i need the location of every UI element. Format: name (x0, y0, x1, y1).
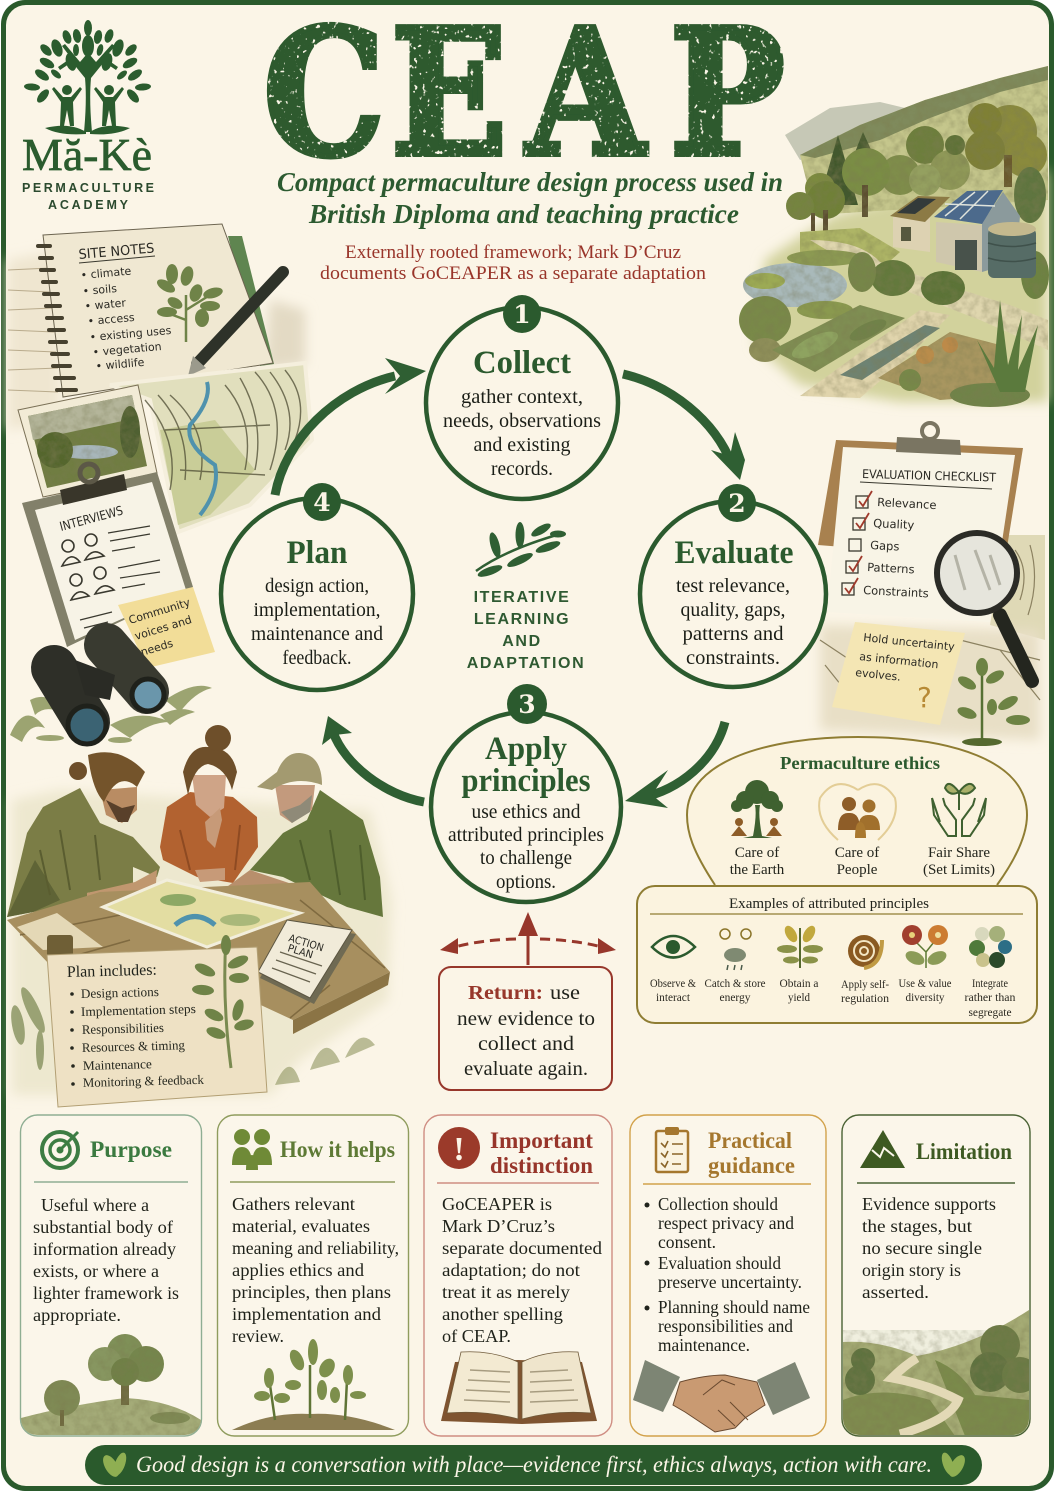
illustration: evaluation checklist clipboard: Hold uncertainty (863, 631, 956, 654)
label: self-regulation: regulation (841, 993, 889, 1005)
site notes text: • existing uses (89, 324, 172, 344)
step 2: Evaluate (640, 484, 826, 687)
label: catch and store: Catch & store (704, 978, 766, 990)
plan list: Design actions (81, 984, 159, 1001)
logo name: Mă-Kè (22, 129, 152, 180)
arrow: apply to plan (322, 716, 424, 802)
bulleted guidance: consent. (658, 1232, 716, 1252)
agave plant (977, 300, 1038, 392)
arrow: collect to evaluate (623, 374, 745, 480)
grass under table (275, 1037, 375, 1085)
icon: exclamation: ! (453, 1131, 465, 1168)
icon: mountain (860, 1130, 905, 1168)
central label: iterative learning and adaptation: ITERATIVE (474, 589, 570, 606)
icon: target (42, 1132, 78, 1168)
return callout: new evidence to (457, 1008, 595, 1030)
icon: leaf left (100, 1451, 129, 1479)
logo subtitle: PERMACULTURE (22, 181, 154, 195)
attribution note: Externally rooted framework; Mark D’Cruz (345, 242, 681, 263)
description: maintenance and (251, 624, 383, 645)
checklist items: Quality (873, 516, 915, 532)
water tank (988, 222, 1036, 278)
uncertainty note (832, 622, 965, 725)
return callout: evaluate again. (464, 1058, 588, 1080)
pond (743, 263, 847, 307)
label: fair share: (Set Limits) (923, 862, 995, 878)
garden beds (772, 305, 905, 372)
description: patterns and (682, 624, 784, 645)
principles panel (637, 886, 1037, 1023)
body text: meaning and reliability, (232, 1238, 399, 1258)
icon: spiral snail (848, 935, 882, 968)
person: centre woman (160, 725, 258, 883)
checklist items: Patterns (867, 560, 915, 576)
heading: Permaculture ethics (780, 753, 940, 773)
plan list: Resources & timing (82, 1037, 186, 1055)
heading: distinction (490, 1153, 593, 1178)
logo: Mă-Kè Permaculture Academy (22, 20, 154, 212)
action plan binder: PLAN (286, 942, 314, 961)
subtitle: Compact permaculture design process used in (277, 167, 783, 197)
illustration: evaluation checklist clipboard: evolves. (855, 666, 901, 684)
label: diversity (898, 978, 952, 1004)
label: care of people: Care of (835, 845, 879, 861)
bulleted guidance: Collection should (658, 1194, 778, 1214)
label: observe: Observe & (650, 978, 696, 990)
heading (462, 731, 591, 799)
label: diversity: Use & value (898, 978, 952, 990)
description: implementation, (254, 600, 380, 621)
body text: Mark D’Cruz’s (442, 1216, 555, 1236)
checklist items: Relevance (877, 495, 937, 512)
label: fair share: Fair Share (928, 845, 990, 861)
panel: how it helps (218, 1115, 408, 1436)
label: care of people: People (837, 862, 878, 878)
body text: Evidence supports (862, 1194, 996, 1214)
body text: asserted. (862, 1282, 929, 1302)
return callout (439, 967, 612, 1090)
action plan binder: ACTION (287, 932, 325, 954)
badge 1: 1 (513, 300, 531, 329)
illustration: planning team around the map (7, 725, 392, 1107)
icon: exclamation (438, 1127, 480, 1169)
description (251, 576, 383, 669)
heading: Plan (286, 535, 348, 571)
panel: important distinction (424, 1115, 612, 1436)
description: gather context, (461, 387, 583, 408)
subtitle: British Diploma and teaching practice (308, 199, 739, 229)
badge 2: 2 (728, 489, 746, 518)
description (443, 387, 601, 480)
illustration: tree on a mound (21, 1334, 201, 1436)
body text: implementation and (232, 1304, 381, 1324)
topographic map (110, 363, 312, 532)
body text: origin story is (862, 1260, 961, 1280)
description: design action, (265, 576, 369, 597)
heading (490, 1128, 593, 1178)
illustration: site notes notebook, map, photo, interviews, binoculars: Community (127, 596, 192, 627)
side leaves (9, 985, 49, 1070)
bulleted guidance: Planning should name (658, 1297, 810, 1317)
site notes text: • access (87, 311, 135, 328)
icon: puzzle pieces (969, 926, 1012, 968)
heading (708, 1128, 795, 1178)
landscape photo (18, 385, 157, 497)
icon: yield plant (777, 924, 823, 968)
panel: limitation (842, 1115, 1038, 1436)
label: self-regulation (841, 979, 889, 1005)
illustration: winding path landscape (843, 1310, 1038, 1436)
heading: Purpose (90, 1137, 172, 1162)
step 1: Collect (426, 295, 618, 499)
icon: open hands and sprout (932, 784, 986, 836)
plan list (70, 984, 205, 1090)
body text: lighter framework is (33, 1283, 179, 1303)
plant sketch (155, 264, 224, 342)
ethics panel (687, 737, 1027, 885)
body text (442, 1194, 602, 1346)
body text: exists, or where a (33, 1261, 159, 1281)
heading: Collect (473, 345, 571, 381)
herb plant (956, 658, 1030, 746)
person: left man with bun (7, 752, 160, 917)
return callout: use (550, 982, 580, 1004)
bulleted guidance: responsibilities and (658, 1316, 793, 1336)
body text (232, 1194, 399, 1346)
heading: Evaluate (674, 535, 794, 571)
body text: principles, then plans (232, 1282, 391, 1302)
illustration: handshake (633, 1360, 810, 1432)
step 3: Apply principles (431, 684, 621, 902)
magnifier (1000, 615, 1032, 681)
icon: checklist clipboard (656, 1127, 688, 1172)
person: right man with cap (213, 753, 383, 925)
heading: guidance (708, 1153, 795, 1178)
notes on table (17, 913, 103, 950)
bulleted guidance: maintenance. (658, 1335, 750, 1355)
icon: sun and rain (720, 929, 751, 970)
body text: of CEAP. (442, 1326, 511, 1346)
illustration: site notes notebook, map, photo, interviews, binoculars: voices and (133, 613, 193, 643)
body text: adaptation; do not (442, 1260, 580, 1280)
central label: iterative learning and adaptation (467, 589, 585, 672)
checklist items: Constraints (863, 583, 929, 600)
bulleted guidance: Evaluation should (658, 1253, 781, 1273)
body text: the stages, but (862, 1216, 972, 1236)
body text (862, 1194, 996, 1302)
icon: flowers (902, 925, 949, 968)
body text: review. (232, 1326, 284, 1346)
return callout: collect and (478, 1033, 574, 1055)
icon: central sprig (476, 521, 566, 579)
description: needs, observations (443, 411, 601, 432)
description (676, 576, 790, 669)
hills (800, 66, 1048, 215)
plan includes note (47, 935, 267, 1107)
label: diversity: diversity (906, 992, 945, 1004)
plan list: Monitoring & feedback (83, 1072, 205, 1090)
meadow base, soft edges (755, 170, 1048, 402)
illustration: evaluation checklist clipboard: as information (859, 650, 939, 671)
illustration: hillside landscape with cabin (739, 66, 1049, 407)
trees (983, 105, 1037, 159)
central label: iterative learning and adaptation: AND (502, 633, 542, 650)
label: obtain a yield: Obtain a (780, 978, 818, 990)
bulleted guidance (644, 1194, 810, 1355)
site notes text (78, 240, 172, 373)
site notes text: SITE NOTES (78, 240, 155, 263)
attribution note (320, 242, 707, 284)
icon: people (232, 1129, 272, 1170)
badge 4 (303, 483, 341, 521)
body text: GoCEAPER is (442, 1194, 552, 1214)
label: care of the earth (730, 845, 785, 878)
plan list: Maintenance (83, 1056, 152, 1073)
badge 2 (718, 484, 756, 522)
panel: practical guidance (630, 1115, 826, 1436)
site notes text: • soils (82, 282, 118, 298)
badge 1 (503, 295, 541, 333)
heading: How it helps (280, 1137, 395, 1162)
sticky note (118, 587, 215, 668)
label: observe (650, 978, 696, 1004)
attribution note: documents GoCEAPER as a separate adaptation (320, 263, 707, 284)
badge 4: 4 (313, 488, 331, 517)
subtitle (277, 167, 783, 229)
binoculars (54, 668, 87, 722)
label: integrate (964, 978, 1016, 1019)
description: constraints. (686, 648, 780, 669)
arrow: return dashed arrows (440, 912, 616, 965)
illustration: evaluation checklist clipboard: ? (917, 681, 932, 714)
site notes text: • vegetation (92, 340, 162, 359)
description: attributed principles (448, 825, 604, 846)
site notes text: • climate (80, 265, 132, 282)
label: catch and store (704, 978, 766, 1004)
interviews clipboard (22, 472, 193, 647)
body text: treat it as merely (442, 1282, 570, 1302)
badge 3 (507, 684, 547, 724)
heading: Important (490, 1128, 593, 1153)
description: to challenge (480, 848, 572, 869)
illustration: site notes notebook, map, photo, interviews, binoculars (8, 224, 312, 744)
wooden table (7, 882, 390, 1034)
illustration: site notes notebook, map, photo, interviews, binoculars: needs (139, 637, 175, 659)
body text: appropriate. (33, 1305, 121, 1325)
icon: care of people heart (819, 784, 896, 840)
central label: iterative learning and adaptation: LEARNING (474, 611, 570, 628)
heading: principles (462, 763, 591, 799)
body text: Useful where a (41, 1195, 149, 1215)
body text: Gathers relevant (232, 1194, 355, 1214)
description: options. (496, 872, 556, 893)
description: use ethics and (472, 802, 581, 823)
badge 3: 3 (518, 690, 536, 719)
label: observe: interact (656, 992, 691, 1004)
description (448, 802, 604, 893)
icon: tree with people (24, 20, 151, 134)
illustration: evaluation checklist clipboard: EVALUATION CHECKLIST (862, 467, 997, 485)
site notes text: • wildlife (95, 356, 145, 373)
logo subtitle: ACADEMY (48, 198, 129, 212)
body text: applies ethics and (232, 1260, 364, 1280)
plan list: Implementation steps (81, 1001, 196, 1019)
icon: eye (652, 936, 695, 958)
heading: Practical (708, 1128, 792, 1153)
central label: iterative learning and adaptation: ADAPTATION (467, 655, 585, 672)
grass under binoculars (10, 686, 212, 743)
heading: Limitation (916, 1139, 1012, 1164)
step 4: Plan (221, 483, 413, 690)
illustration: seedlings (232, 1339, 395, 1430)
label: catch and store: energy (720, 992, 751, 1004)
label: care of people (835, 845, 879, 878)
closing banner (85, 1445, 982, 1485)
plant on note (192, 935, 255, 1068)
arrow: plan to collect (275, 358, 426, 495)
arrow: evaluate to apply (625, 722, 725, 808)
site map on table (103, 880, 300, 947)
heading: Apply (485, 731, 567, 767)
description: quality, gaps, (680, 600, 786, 621)
illustration: site notes notebook, map, photo, interviews, binoculars: INTERVIEWS (58, 503, 125, 534)
illustration: open book (441, 1352, 597, 1424)
label: integrate: Integrate (972, 978, 1008, 990)
description: records. (491, 459, 553, 480)
description: and existing (474, 435, 571, 456)
label: care of the earth: Care of (735, 845, 779, 861)
bulleted guidance: preserve uncertainty. (658, 1272, 802, 1292)
checklist items: Gaps (870, 538, 900, 554)
logo subtitle (22, 181, 154, 212)
panel: purpose (20, 1115, 202, 1436)
body text: separate documented (442, 1238, 602, 1258)
label: self-regulation: Apply self- (841, 979, 889, 991)
plan list: Responsibilities (82, 1020, 164, 1037)
closing quote: Good design is a conversation with place—evidence first, ethics always, action with care. (136, 1452, 932, 1477)
icon: tree with people (731, 780, 783, 838)
interviewee icons (62, 526, 160, 628)
icon: leaf right (939, 1451, 968, 1479)
label: care of the earth: the Earth (730, 862, 785, 878)
label: obtain a yield: yield (788, 992, 810, 1004)
cabin (890, 190, 1020, 272)
pen (197, 272, 283, 364)
description: test relevance, (676, 576, 790, 597)
heading: Examples of attributed principles (729, 896, 929, 912)
label: integrate: rather than (964, 992, 1016, 1004)
label: obtain a yield (780, 978, 818, 1004)
plan includes heading: Plan includes: (67, 962, 157, 981)
body text: material, evaluates (232, 1216, 370, 1236)
bulleted guidance: respect privacy and (658, 1213, 794, 1233)
return callout: Return: (468, 982, 543, 1004)
map sheet behind clipboard (990, 535, 1045, 640)
checklist items (842, 491, 937, 600)
action plan binder (258, 920, 356, 1004)
body text: substantial body of (33, 1217, 173, 1237)
description: feedback. (282, 648, 352, 669)
shrubs (871, 260, 915, 296)
site notes text: • water (84, 296, 127, 313)
illustration: evaluation checklist clipboard (818, 423, 1045, 746)
tan path (810, 240, 1048, 350)
body text: another spelling (442, 1304, 563, 1324)
body text: information already (33, 1239, 176, 1259)
body text (33, 1195, 179, 1325)
body text: no secure single (862, 1238, 982, 1258)
label: fair share (923, 845, 995, 878)
label: integrate: segregate (968, 1007, 1012, 1019)
